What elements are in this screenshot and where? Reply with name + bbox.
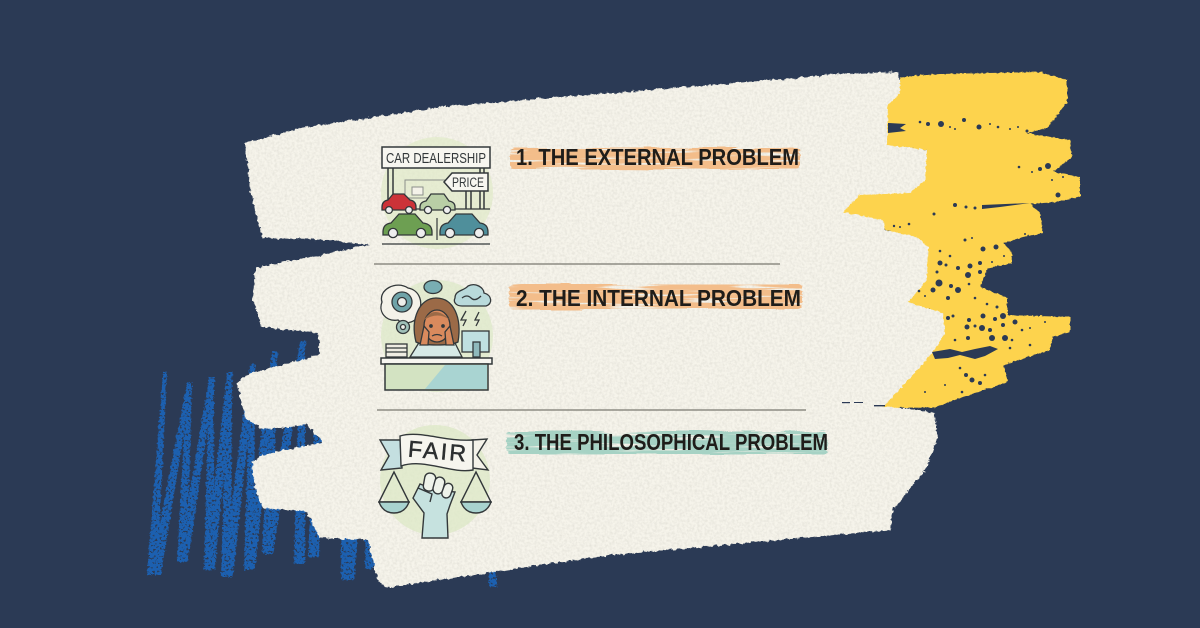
icon: stressed woman at desk: [381, 280, 493, 392]
item 3: philosophical problem: [379, 425, 828, 538]
heading: external problem: 1. THE EXTERNAL PROBLEM: [516, 144, 799, 170]
car: pale green: [420, 194, 455, 214]
paper brush shape: [237, 72, 952, 588]
icon: fair scales and fist: [379, 425, 491, 538]
icon: car dealership: [381, 137, 493, 249]
highlight stroke: teal: [506, 431, 827, 454]
highlight stroke: orange: [510, 148, 800, 169]
car: teal: [440, 214, 488, 238]
item 1: external problem: [381, 137, 800, 249]
highlight stroke: orange: [509, 284, 802, 309]
car: red: [382, 194, 416, 213]
heading: internal problem: 2. THE INTERNAL PROBLEM: [516, 285, 801, 311]
divider 1: [374, 263, 780, 265]
sign text: car dealership: CAR DEALERSHIP: [386, 151, 486, 167]
car: green: [383, 214, 432, 238]
yellow paint stroke: [842, 72, 1080, 408]
sign text: price: PRICE: [452, 175, 484, 190]
blue scribble: [148, 342, 496, 586]
item 2: internal problem: [381, 280, 802, 392]
heading: philosophical problem: 3. THE PHILOSOPHICAL PROBLEM: [514, 429, 828, 455]
divider 2: [377, 409, 806, 411]
banner text: fair: FAIR: [407, 436, 467, 466]
